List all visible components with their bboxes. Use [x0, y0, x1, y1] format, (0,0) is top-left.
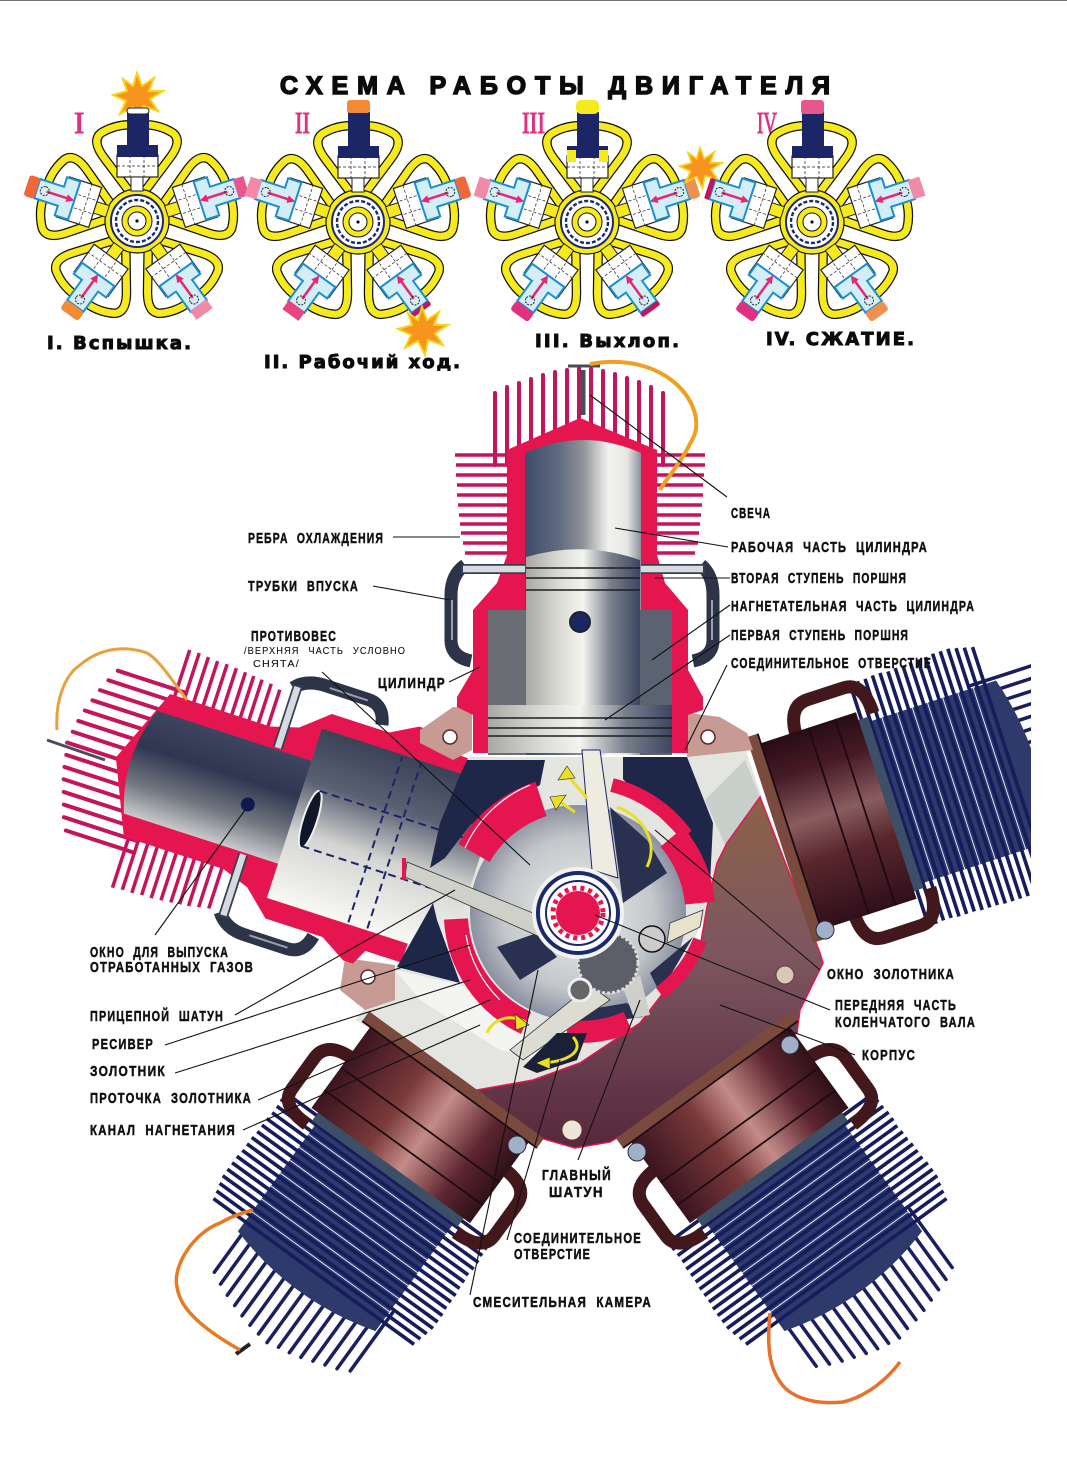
lug hole right — [701, 730, 715, 744]
diagram I: flash — [20, 73, 253, 354]
left piston pin hole — [239, 796, 257, 813]
flash spark I — [113, 73, 163, 121]
housing bolt right — [776, 966, 794, 984]
piston lower stage — [488, 705, 672, 753]
lug right — [687, 713, 753, 757]
top cutaway cylinder — [451, 367, 713, 755]
link rod right — [667, 910, 703, 943]
lug left — [420, 707, 472, 760]
left piston slot — [294, 789, 326, 850]
title: СХЕМА РАБОТЫ ДВИГАТЕЛЯ — [280, 72, 830, 100]
label mixing chamber: СМЕСИТЕЛЬНАЯ КАМЕРА — [473, 1295, 652, 1311]
main engine cutaway — [28, 362, 1067, 1417]
pin lower — [569, 979, 591, 1001]
label second stage: ВТОРАЯ СТУПЕНЬ ПОРШНЯ — [731, 571, 907, 587]
label exhaust window line one: ОКНО ДЛЯ ВЫПУСКА — [90, 945, 229, 961]
lower-left lug — [340, 958, 395, 1010]
silver block lower shading — [395, 970, 545, 1060]
leader lines — [155, 395, 855, 1295]
label master rod line two: ШАТУН — [549, 1185, 604, 1201]
label link rod: ПРИЦЕПНОЙ ШАТУН — [90, 1007, 224, 1025]
spark plug cap top — [568, 364, 600, 368]
label housing: КОРПУС — [862, 1048, 916, 1064]
lug hole left — [443, 730, 457, 744]
label connecting hole: СОЕДИНИТЕЛЬНОЕ ОТВЕРСТИЕ — [731, 656, 932, 672]
lower-right exterior cylinder — [598, 998, 1001, 1417]
label working part: РАБОЧАЯ ЧАСТЬ ЦИЛИНДРА — [731, 540, 928, 556]
lower-left exterior cylinder — [159, 998, 562, 1417]
navy block top right — [617, 757, 713, 883]
link rod lower right — [622, 975, 650, 1018]
spark plug left — [47, 740, 105, 760]
piston pin — [570, 612, 590, 632]
label counterweight: ПРОТИВОВЕС — [251, 629, 337, 645]
flash spark II — [398, 307, 448, 355]
counterweight note line one: /ВЕРХНЯЯ ЧАСТЬ УСЛОВНО — [244, 645, 406, 657]
crank block base — [355, 748, 762, 1092]
flower engine II — [241, 100, 475, 327]
label valve window: ОКНО ЗОЛОТНИКА — [827, 967, 955, 983]
flower engine I — [20, 108, 253, 327]
navy block top left — [430, 760, 545, 868]
diagram III: exhaust — [470, 100, 722, 352]
label exhaust window line two: ОТРАБОТАННЫХ ГАЗОВ — [90, 960, 254, 976]
roman numeral IV: IV — [757, 105, 777, 140]
label cylinder: ЦИЛИНДР — [378, 676, 446, 692]
spark plug top — [580, 370, 586, 415]
counterweight note line two: СНЯТА/ — [253, 658, 300, 670]
roman numeral II: II — [295, 105, 310, 140]
lower-left lug hole — [361, 970, 375, 984]
labels left bottom — [90, 945, 254, 1139]
yellow flow arrows — [487, 775, 651, 1063]
spark wire lower left — [176, 1210, 253, 1350]
caption II: II. Рабочий ход. — [264, 352, 460, 373]
flower engine III — [470, 100, 704, 328]
link rod tip — [402, 858, 406, 880]
spark wire lower right — [769, 1313, 900, 1403]
link rod left — [405, 862, 540, 937]
labels left top — [244, 531, 446, 692]
spark plug lower left — [236, 1344, 250, 1354]
labels bottom centre — [473, 1166, 652, 1311]
roman numeral III: III — [522, 105, 545, 140]
master rod up — [582, 750, 618, 878]
barrel bolts — [508, 921, 834, 1161]
navy block left — [397, 903, 460, 983]
arrow heads — [515, 766, 575, 1069]
labels right bottom — [827, 967, 976, 1064]
caption III: III. Выхлоп. — [535, 331, 679, 352]
label charging part: НАГНЕТАТЕЛЬНАЯ ЧАСТЬ ЦИЛИНДРА — [731, 599, 975, 615]
label rotary valve: ЗОЛОТНИК — [90, 1064, 166, 1080]
label first stage: ПЕРВАЯ СТУПЕНЬ ПОРШНЯ — [731, 628, 909, 644]
label connecting hole lower line two: ОТВЕРСТИЕ — [514, 1247, 591, 1263]
right cylinder clip — [1031, 620, 1067, 980]
spark wire top — [590, 362, 696, 490]
label front part line one: ПЕРЕДНЯЯ ЧАСТЬ — [835, 998, 957, 1014]
right exterior cylinder — [740, 615, 1067, 964]
central hub — [532, 867, 624, 959]
diagram IV: compression — [701, 100, 929, 350]
caption I: I. Вспышка. — [47, 333, 191, 354]
spark wire left — [57, 649, 187, 730]
roman numeral I: I — [74, 105, 84, 140]
caption IV: IV. СЖАТИЕ. — [766, 329, 914, 350]
link rod lower — [510, 985, 610, 1060]
red ring segments — [456, 785, 700, 1032]
label front part line two: КОЛЕНЧАТОГО ВАЛА — [835, 1015, 976, 1031]
small gear — [578, 933, 638, 993]
dark blades — [497, 807, 693, 1027]
crank upper band — [545, 757, 623, 797]
label intake tubes: ТРУБКИ ВПУСКА — [248, 579, 359, 595]
label master rod line one: ГЛАВНЫЙ — [542, 1166, 612, 1184]
label receiver: РЕСИВЕР — [92, 1037, 154, 1053]
housing bolt bottom — [562, 1120, 582, 1140]
flower engine IV — [701, 100, 929, 328]
label cooling fins: РЕБРА ОХЛАЖДЕНИЯ — [248, 531, 384, 547]
label valve groove: ПРОТОЧКА ЗОЛОТНИКА — [90, 1091, 252, 1107]
label connecting hole lower line one: СОЕДИНИТЕЛЬНОЕ — [514, 1231, 642, 1247]
left cutaway cylinder — [28, 615, 516, 997]
label spark plug: СВЕЧА — [731, 506, 771, 522]
labels right top — [731, 506, 975, 672]
crank disc — [470, 805, 686, 1021]
right block shading — [705, 760, 760, 845]
pin right — [639, 926, 665, 952]
dark intake port — [523, 1033, 587, 1073]
diagram II: working stroke — [241, 100, 475, 373]
flash spark III — [680, 148, 722, 188]
brown housing — [477, 797, 823, 1148]
label charging channel: КАНАЛ НАГНЕТАНИЯ — [90, 1123, 236, 1139]
piston upper stage — [526, 549, 640, 705]
